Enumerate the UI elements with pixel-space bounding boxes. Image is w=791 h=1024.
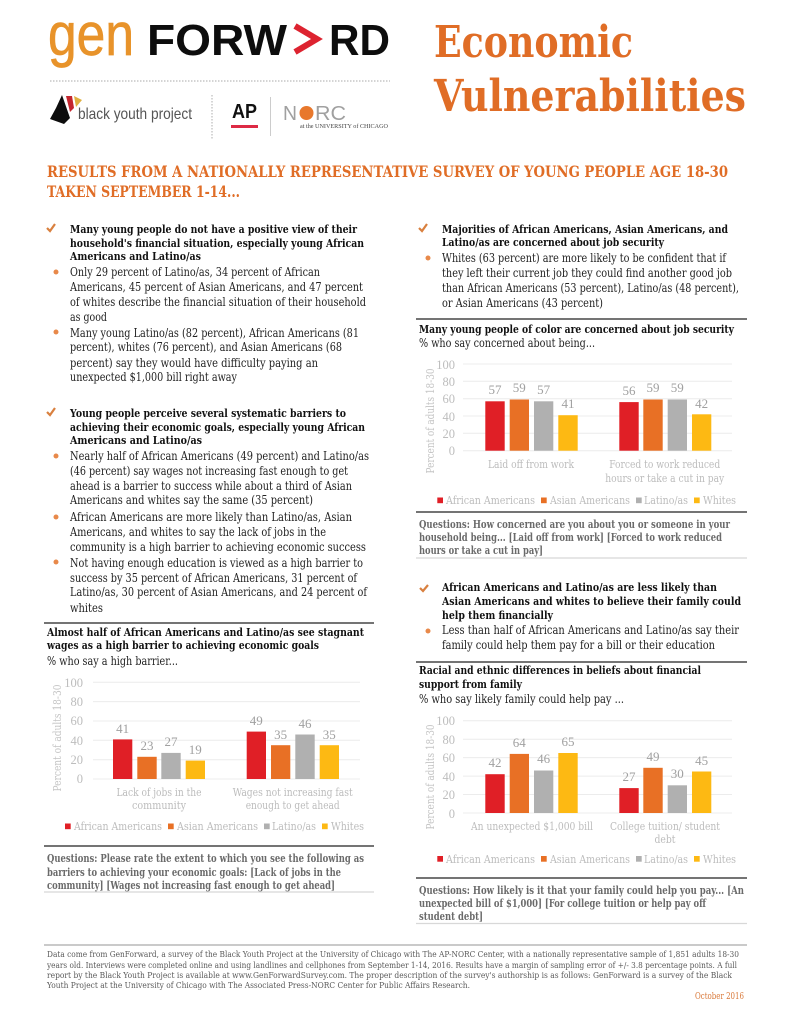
legend: chart 2: Whites: [703, 493, 736, 507]
logo: GenForward: FORW: [147, 16, 287, 65]
text block: systematic barriers: Not having enough education is viewed as a high barrier to: [70, 556, 363, 570]
bar chart 1: community: [132, 798, 186, 812]
bar chart 2: 0: [449, 444, 455, 458]
bar chart 1: Lack of jobs in the: [116, 785, 202, 799]
bar chart 2: 20: [442, 427, 455, 441]
bar chart 3: 20: [442, 788, 455, 802]
bar chart 2: 56: [622, 383, 636, 398]
text block: household financial situation: unexpected $1,000 bill right away: [70, 370, 237, 384]
bar chart 3: Percent of adults 18-30: [424, 724, 437, 830]
heading: chart 2: % who say concerned about being...: [419, 336, 595, 350]
text block: job security: [419, 222, 739, 310]
bar chart 2: 57: [488, 382, 502, 397]
bar chart 2: 59: [646, 380, 660, 395]
questions: chart 3: unexpected bill of $1,000] [For college tuition or help pay off: [419, 897, 707, 910]
text block: household financial situation: [47, 222, 366, 384]
text block: systematic barriers: [47, 406, 369, 615]
legend: chart 3: African Americans: [445, 852, 535, 866]
text block: systematic barriers: Latino/as, 30 percent of Asian Americans, and 24 percent of: [70, 585, 368, 599]
bar chart 1: 20: [70, 753, 83, 767]
text block: family help: Less than half of African Americans and Latino/as say their: [442, 623, 739, 637]
bar chart 3: 80: [442, 733, 455, 747]
heading: chart 3: Racial and ethnic differences in beliefs about financial: [419, 663, 701, 677]
questions: chart 1: barriers to achieving your economic goals: [Lack of jobs in the: [47, 866, 341, 879]
legend: chart 3: Latino/as: [644, 852, 688, 866]
heading: chart 3: % who say likely family could help pay ...: [419, 692, 624, 706]
bar chart 1: 49: [250, 713, 263, 728]
bar chart 3: 100: [436, 714, 455, 728]
bar chart 1: 35: [274, 727, 287, 742]
bar chart 1: 60: [70, 714, 83, 728]
text block: systematic barriers: Americans and whites say the same (35 percent): [69, 493, 313, 507]
text block: systematic barriers: Americans and Latino/as: [69, 433, 202, 447]
heading: chart 3: support from family: [419, 677, 523, 691]
text block: household financial situation: Americans, 45 percent of Asian Americans, and 47 percent: [69, 280, 363, 294]
legend: chart 3: Asian Americans: [549, 852, 630, 866]
bar chart 2: 60: [442, 392, 455, 406]
bar chart 1: 40: [70, 734, 83, 748]
bar chart 1: Wages not increasing fast: [233, 785, 353, 799]
bar chart 2: hours or take a cut in pay: [605, 471, 725, 485]
bar chart 1: 27: [164, 734, 178, 749]
bar chart 3: 60: [442, 751, 455, 765]
logo: NORC: N: [283, 103, 297, 125]
questions: chart 2: [419, 518, 730, 557]
heading: chart 3: [419, 663, 701, 706]
legend: chart 1: African Americans: [73, 819, 162, 833]
title: [433, 17, 746, 122]
bar chart 3: 46: [537, 751, 551, 766]
bar chart 2: 40: [442, 410, 455, 424]
bar chart 3: 45: [695, 753, 708, 768]
heading: chart 1: [46, 625, 365, 668]
text block: household financial situation: Many young Latino/as (82 percent), African Americans (81: [70, 326, 359, 340]
bar chart 2: 59: [671, 380, 684, 395]
logo: GenForward: [48, 1, 390, 68]
questions: chart 1: Questions: Please rate the extent to which you see the following as: [47, 852, 364, 865]
bar chart 1: enough to get ahead: [246, 798, 340, 812]
legend: chart 1: Whites: [331, 819, 364, 833]
bar chart 3: debt: [654, 832, 676, 846]
bar chart 1: [51, 676, 360, 812]
questions: chart 1: [47, 852, 364, 892]
bar chart 1: 35: [323, 727, 336, 742]
bar chart 1: 46: [298, 716, 312, 731]
text block: household financial situation: household's financial situation, especially young African: [70, 236, 364, 250]
text block: household financial situation: Only 29 percent of Latino/as, 34 percent of African: [70, 265, 320, 279]
title: Vulnerabilities: [433, 71, 746, 122]
bar chart 1: 100: [64, 676, 83, 690]
legend: chart 1: [65, 819, 364, 833]
text block: systematic barriers: success by 35 percent of African Americans, 31 percent of: [70, 571, 358, 585]
bar chart 2: 100: [436, 358, 455, 372]
heading: chart 1: % who say a high barrier...: [47, 654, 178, 668]
logo: black youth project: black youth project: [78, 106, 192, 123]
legend: chart 2: African Americans: [445, 493, 535, 507]
text block: systematic barriers: Nearly half of African Americans (49 percent) and Latino/as: [70, 449, 369, 463]
legend: chart 3: Whites: [703, 852, 736, 866]
bar chart 2: Forced to work reduced: [609, 457, 721, 471]
text block: job security: they left their current job they could find another good job: [442, 266, 732, 280]
bar chart 2: Laid off from work: [488, 457, 575, 471]
panel: chart job security: [416, 319, 747, 558]
heading: chart 2: [419, 322, 735, 350]
text block: household financial situation: of whites describe the financial situation of their household: [70, 295, 366, 309]
text block: family help: family could help them pay for a bill or their education: [442, 638, 715, 652]
bar chart 3: 42: [488, 755, 502, 770]
bar chart 1: 80: [70, 695, 83, 709]
bar chart 3: 27: [622, 769, 636, 784]
bar chart 1: 0: [77, 772, 83, 786]
bar chart 2: 59: [513, 380, 526, 395]
footer: methodology note: Youth Project at the University of Chicago with The Associated Press-NORC Center for Public Affairs Research.: [46, 981, 470, 991]
text block: job security: Latino/as are concerned about job security: [442, 235, 665, 249]
bar chart 3: An unexpected $1,000 bill: [470, 819, 593, 833]
title: Economic: [434, 17, 633, 68]
text block: job security: or Asian Americans (43 percent): [442, 296, 603, 310]
panel: chart family support: [416, 662, 747, 924]
bar chart 3: 30: [671, 766, 684, 781]
text block: systematic barriers: Americans, and whites to say the lack of jobs in the: [69, 525, 326, 539]
text block: family help: help them financially: [442, 608, 554, 622]
bar chart 3: 49: [646, 749, 660, 764]
panel: chart high barriers: [44, 623, 374, 892]
bar chart 1: Percent of adults 18-30: [51, 684, 64, 792]
legend: chart 3: [437, 852, 736, 866]
text block: household financial situation: as good: [70, 310, 107, 324]
bar chart 1: 19: [189, 742, 202, 757]
bar chart 3: [424, 714, 732, 846]
text block: family help: [420, 580, 741, 652]
questions: chart 1: community] [Wages not increasing fast enough to get ahead]: [47, 879, 335, 892]
questions: chart 2: hours or take a cut in pay]: [419, 544, 543, 557]
bar chart 2: 80: [442, 375, 455, 389]
logo: NORC: [283, 103, 388, 130]
legend: chart 2: Asian Americans: [549, 493, 630, 507]
heading: chart 1: Almost half of African Americans and Latino/as see stagnant: [46, 625, 365, 639]
text block: household financial situation: Many young people do not have a positive view of their: [70, 222, 358, 236]
bar chart 2: 41: [562, 396, 574, 411]
bar chart 1: 41: [116, 721, 129, 736]
subtitle: [47, 162, 728, 201]
bar chart 3: 65: [562, 734, 574, 749]
legend: chart 1: Latino/as: [272, 819, 316, 833]
text block: systematic barriers: (46 percent) say wages not increasing fast enough to get: [70, 464, 348, 478]
bar chart 3: 64: [513, 735, 526, 750]
text block: job security: Majorities of African Americans, Asian Americans, and: [442, 222, 728, 236]
text block: household financial situation: Americans and Latino/as: [69, 249, 201, 263]
legend: chart 1: Asian Americans: [176, 819, 258, 833]
logo: GenForward: gen: [48, 1, 134, 68]
text block: family help: African Americans and Latino/as are less likely than: [441, 580, 717, 594]
bar chart 3: College tuition/ student: [610, 819, 720, 833]
text block: systematic barriers: achieving their economic goals, especially young African: [70, 420, 365, 434]
text block: systematic barriers: whites: [70, 601, 103, 615]
text block: systematic barriers: Young people perceive several systematic barriers to: [69, 406, 346, 420]
text block: systematic barriers: African Americans are more likely than Latino/as, Asian: [69, 510, 352, 524]
text block: systematic barriers: community is a high barrier to achieving economic success: [70, 540, 366, 554]
logo: black youth project: [50, 95, 192, 124]
legend: chart 2: Latino/as: [644, 493, 688, 507]
bar chart 2: Percent of adults 18-30: [424, 368, 437, 474]
bar chart 1: 23: [140, 738, 154, 753]
logo: GenForward: RD: [329, 16, 390, 65]
date: October 2016: [695, 992, 744, 1002]
bar chart 2: 42: [695, 396, 708, 411]
bar chart 3: 0: [449, 807, 455, 821]
questions: chart 3: [419, 884, 744, 923]
heading: chart 1: wages as a high barrier to achieving economic goals: [46, 638, 319, 652]
text block: household financial situation: percent), whites (76 percent), and Asian Americans (68: [70, 340, 342, 354]
text block: job security: Whites (63 percent) are more likely to be confident that if: [442, 251, 727, 265]
text block: household financial situation: percent) say they would have difficulty paying an: [70, 356, 318, 370]
logo: NORC: RC: [315, 103, 346, 125]
questions: chart 3: student debt]: [419, 910, 483, 923]
logo: NORC: at the UNIVERSITY of CHICAGO: [300, 123, 388, 130]
bar chart 3: 40: [442, 770, 455, 784]
legend: chart 2: [437, 493, 736, 507]
bar chart 2: [424, 358, 732, 485]
text block: systematic barriers: ahead is a barrier to success while about a third of Asian: [70, 479, 352, 493]
footer: methodology note: [46, 950, 739, 991]
subtitle: TAKEN SEPTEMBER 1-14...: [47, 182, 240, 201]
bar chart 2: 57: [537, 382, 551, 397]
logo: AP: AP: [232, 101, 257, 123]
